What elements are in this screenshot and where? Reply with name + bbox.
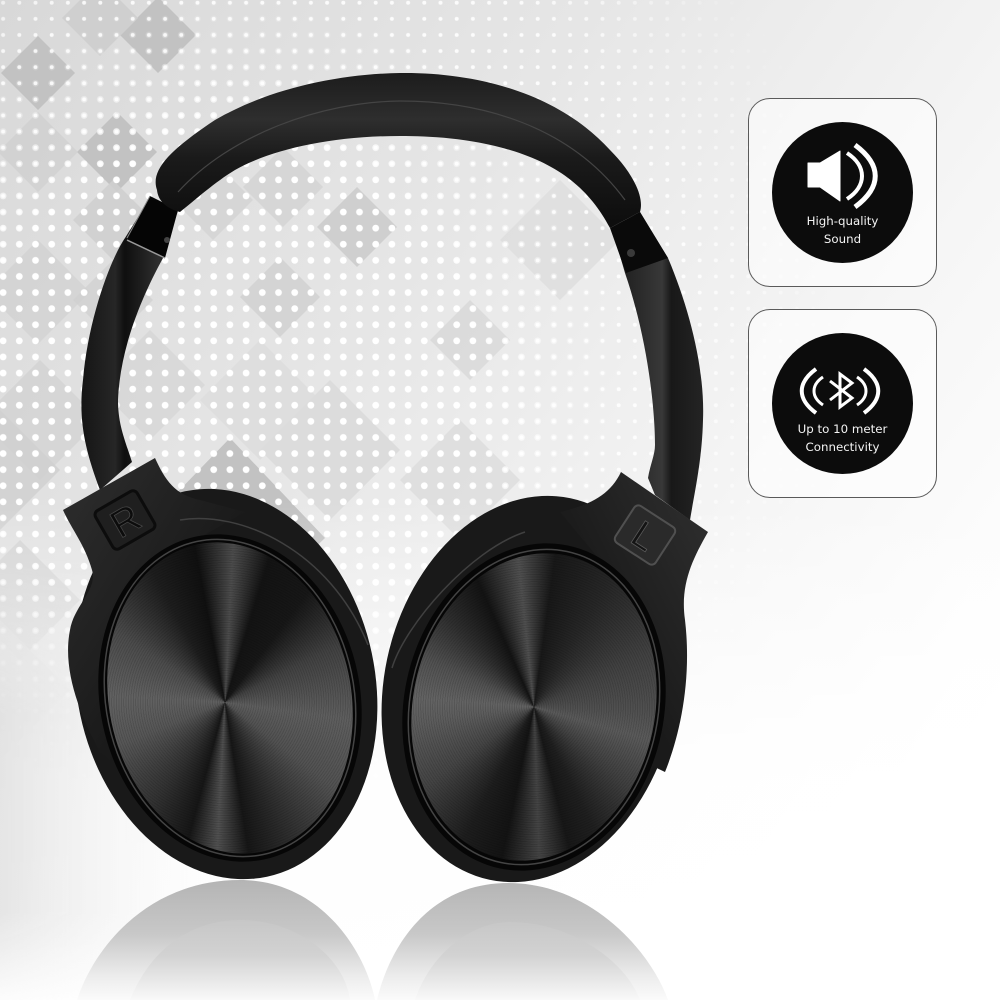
badge: R: R xyxy=(104,497,148,547)
label: high-quality sound xyxy=(807,214,878,246)
label: high-quality sound: High-quality xyxy=(807,214,878,228)
badge circle: sound xyxy=(772,122,913,263)
badge circle: connectivity xyxy=(772,333,913,474)
left ear cup body xyxy=(39,458,413,908)
card: high-quality sound xyxy=(748,98,937,287)
card: connectivity xyxy=(748,309,937,498)
left arm xyxy=(81,198,178,490)
icon: bluetooth waves xyxy=(800,367,880,415)
right arm xyxy=(612,212,703,520)
right ear cup body xyxy=(347,468,713,910)
label: up to 10 meter connectivity xyxy=(798,422,888,454)
icon: speaker xyxy=(808,143,878,209)
headband xyxy=(156,73,641,228)
badge: L: L xyxy=(624,513,664,560)
badge: L xyxy=(612,503,677,567)
label: up to 10 meter connectivity: Up to 10 meter xyxy=(798,422,887,436)
right ear plate xyxy=(383,530,685,884)
right hinge xyxy=(610,212,668,273)
left ear plate xyxy=(79,519,381,877)
badge: R xyxy=(93,489,157,552)
label: high-quality sound: Sound xyxy=(824,232,861,246)
label: up to 10 meter connectivity: Connectivity xyxy=(806,440,879,454)
left hinge xyxy=(127,196,178,258)
